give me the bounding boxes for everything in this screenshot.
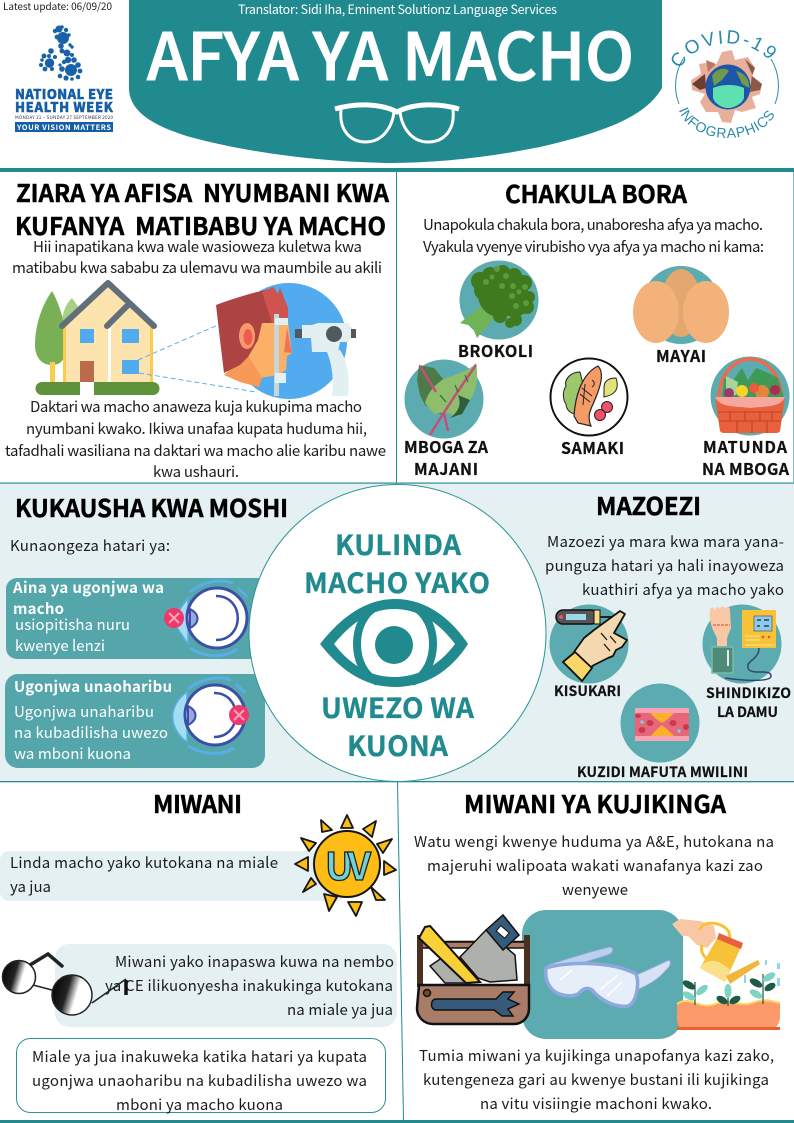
label: SAMAKI — [561, 435, 624, 459]
logo: COVID-19 infographics: COVID-19 — [672, 30, 776, 66]
callout: protect eyes: ya jua — [10, 876, 51, 897]
label: MAJANI — [414, 456, 478, 480]
label — [702, 434, 790, 480]
logo: National Eye Health Week: MONDAY 21 – SUNDAY 27 SEPTEMBER 2020 — [15, 115, 113, 121]
callout: protect eyes — [0, 851, 345, 901]
intro text — [12, 236, 382, 278]
callout: sun risk — [16, 1038, 386, 1115]
label: MBOGA ZA — [404, 434, 489, 458]
callout: CE mark — [55, 944, 397, 1027]
icon: leafy greens — [404, 360, 484, 438]
panel: safety glasses — [414, 785, 780, 1114]
icon: toolbox — [417, 915, 530, 1024]
description text: Daktari wa macho anaweza kuja kukupima macho — [30, 396, 362, 417]
icon: eye with damaged macula — [173, 678, 249, 753]
icon: safety goggles — [546, 947, 670, 1006]
description text: kutengeneza gari au kwenye bustani ili kujikinga — [423, 1069, 769, 1090]
logo: National Eye Health Week — [15, 25, 114, 133]
central subheading: KUONA — [347, 725, 449, 765]
label: LA DAMU — [717, 702, 778, 722]
icon: diabetes finger test — [550, 604, 628, 684]
heading: MAZOEZI — [596, 487, 701, 522]
callout: sun risk: ugonjwa unaoharibu na kubadilisha uwezo wa — [32, 1070, 367, 1091]
panel: smoking — [5, 489, 288, 768]
callout: macular degeneration — [5, 674, 265, 768]
label — [404, 434, 489, 480]
callout: CE mark: ya CE ilikuonyesha inakukinga kutokana — [105, 975, 393, 996]
intro text: Watu wengi kwenye huduma ya A&E, hutokana na — [414, 831, 774, 852]
icon: blood pressure monitor — [702, 604, 782, 684]
label: KUZIDI MAFUTA MWILINI — [577, 762, 748, 782]
intro text — [414, 831, 774, 900]
callout: CE mark: na miale ya jua — [287, 999, 393, 1020]
intro text: majeruhi walipoata wakati wanafanya kazi zao — [427, 855, 763, 876]
callout: macular degeneration: Ugonjwa unaoharibu — [14, 676, 172, 697]
callout: macular degeneration: na kubadilisha uwezo — [14, 722, 168, 743]
logo: National Eye Health Week: HEALTH WEEK — [15, 97, 114, 116]
description text: nyumbani kwako. Ikiwa unafaa kupata huduma hii, — [26, 418, 367, 439]
icon: fish plate — [550, 358, 628, 436]
intro text: matibabu kwa sababu za ulemavu wa maumbile au akili — [12, 257, 382, 278]
heading: KUKAUSHA KWA MOSHI — [15, 489, 288, 524]
callout: macular degeneration: wa mboni kuona — [14, 743, 131, 764]
intro text: punguza hatari ya hali inayoweza — [545, 555, 784, 576]
callout: sun risk: mboni ya macho kuona — [116, 1094, 283, 1115]
heading: KUFANYA MATIBABU YA MACHO — [15, 207, 386, 242]
label: KISUKARI — [554, 681, 621, 701]
label — [706, 683, 791, 722]
central subheading: UWEZO WA — [321, 687, 475, 727]
label: BROKOLI — [458, 338, 533, 362]
header banner — [129, 0, 662, 163]
divider lines — [0, 782, 794, 1123]
description text — [5, 396, 386, 482]
description text: kwa ushauri. — [153, 461, 239, 482]
central heading: KULINDA — [335, 524, 462, 564]
description text: Tumia miwani ya kujikinga unapofanya kazi zako, — [419, 1045, 774, 1066]
intro text — [423, 214, 764, 257]
section divider lines — [0, 168, 794, 484]
icon: broccoli — [460, 260, 538, 340]
panel background: middle band — [0, 484, 794, 781]
icon: eggs — [633, 266, 729, 344]
icon: eye examination — [216, 283, 356, 399]
callout: cataract: Aina ya ugonjwa wa — [12, 577, 164, 598]
panel: sunglasses — [0, 785, 397, 1115]
callout: cataract — [6, 577, 268, 659]
callout: cataract: kwenye lenzi — [15, 635, 105, 656]
icon: map of UK made of dots — [39, 25, 82, 81]
panel: healthy food — [404, 175, 790, 480]
intro text: Vyakula vyenye virubisho vya afya ya macho ni kama: — [423, 236, 764, 257]
icon: round sunglasses — [2, 954, 126, 1015]
icon: eye with cataract — [164, 581, 247, 656]
dashed connector lines — [138, 325, 256, 392]
central heading — [304, 524, 490, 602]
teal goggles backdrop — [522, 910, 683, 1039]
panel: central circle — [249, 484, 546, 782]
intro text: kuathiri afya ya macho yako — [582, 579, 784, 600]
heading: MIWANI — [153, 785, 242, 820]
label: NA MBOGA — [702, 456, 790, 480]
label: MAYAI — [656, 343, 706, 367]
callout: sun risk: Miale ya jua inakuweka katika hatari ya kupata — [32, 1046, 367, 1067]
heading: MIWANI YA KUJIKINGA — [464, 785, 727, 820]
intro text: Unapokula chakula bora, unaboresha afya ya macho. — [423, 214, 763, 235]
central heading: MACHO YAKO — [304, 562, 490, 602]
callout: CE mark: Miwani yako inapaswa kuwa na nembo — [115, 951, 394, 972]
icon: UV sun: UV — [325, 836, 371, 891]
callout: macular degeneration: Ugonjwa unaharibu — [14, 701, 154, 722]
icon: blocked artery — [620, 684, 700, 762]
description text — [419, 1045, 774, 1114]
callout: cataract: usiopitisha nuru — [15, 614, 130, 635]
central subheading — [321, 687, 475, 765]
intro text: wenyewe — [562, 879, 628, 900]
heading — [15, 174, 390, 242]
logo: National Eye Health Week: YOUR VISION MATTERS — [16, 122, 111, 133]
intro text: Hii inapatikana kwa wale wasioweza kuletwa kwa — [33, 236, 362, 257]
logo: COVID-19 infographics: INFOGRAPHICS — [679, 107, 774, 138]
intro text — [545, 531, 784, 600]
callout: cataract: macho — [13, 598, 64, 619]
icon: eye — [320, 599, 468, 687]
title: AFYA YA MACHO — [147, 5, 634, 99]
panel: exercise — [545, 487, 791, 782]
label: MATUNDA — [703, 434, 788, 458]
icon: hands holding masked globe — [691, 50, 762, 123]
icon: fruit and vegetable basket — [710, 356, 790, 436]
intro text: Mazoezi ya mara kwa mara yana- — [547, 531, 784, 552]
panel: home eye test visit — [5, 174, 390, 482]
icon: watering can and plants — [672, 919, 780, 1030]
icon: UV sun — [295, 815, 396, 916]
heading: ZIARA YA AFISA NYUMBANI KWA — [16, 174, 390, 209]
description text: tafadhali wasiliana na daktari wa macho alie karibu nawe — [5, 440, 386, 461]
logo: National Eye Health Week: NATIONAL EYE — [15, 84, 113, 103]
callout: protect eyes: Linda macho yako kutokana na miale — [10, 852, 278, 873]
description text: na vitu visiingie machoni kwako. — [480, 1093, 712, 1114]
label: SHINDIKIZO — [706, 683, 791, 703]
divider line — [0, 781, 794, 782]
intro text: Kunaongeza hatari ya: — [10, 535, 170, 556]
heading: CHAKULA BORA — [505, 175, 688, 210]
icon: house — [35, 283, 160, 395]
icon: glasses — [335, 105, 459, 142]
logo: COVID-19 infographics — [672, 30, 779, 138]
